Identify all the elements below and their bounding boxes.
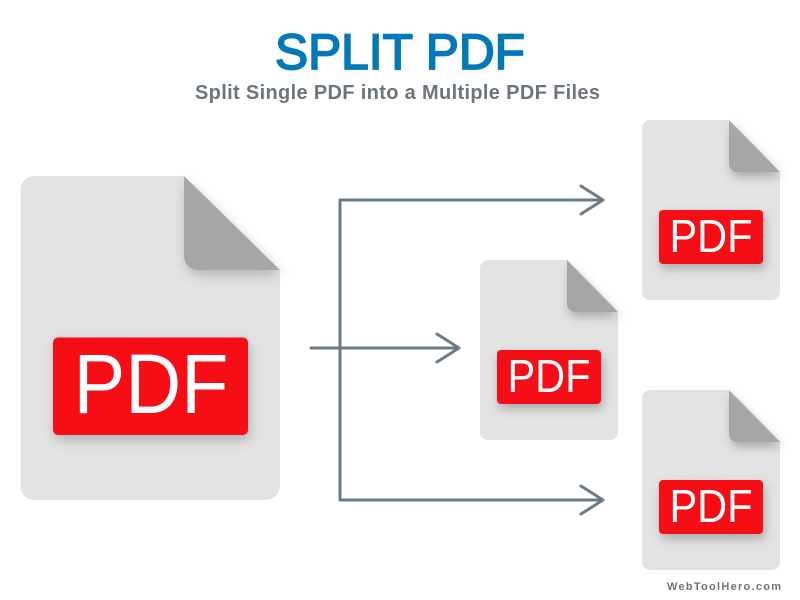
arrow to middle file — [311, 334, 459, 362]
bottom output PDF file: PDF — [670, 480, 752, 532]
source PDF label: PDF — [74, 337, 228, 431]
source PDF file icon — [20, 176, 280, 500]
watermark: WebToolHero.com — [667, 581, 781, 593]
arrows: splitting connector — [311, 186, 603, 514]
source document fold — [184, 176, 280, 270]
top output PDF file: PDF — [670, 210, 752, 262]
arrow to top file — [340, 186, 603, 348]
top output PDF file — [642, 120, 780, 300]
bottom output PDF file — [642, 390, 780, 570]
source document body — [20, 176, 280, 500]
middle output PDF file: PDF — [508, 350, 590, 402]
middle output PDF file — [480, 260, 618, 440]
title: SPLIT PDF — [275, 24, 525, 80]
arrow to bottom file — [340, 348, 603, 514]
subtitle: Split Single PDF into a Multiple PDF Files — [195, 82, 600, 104]
